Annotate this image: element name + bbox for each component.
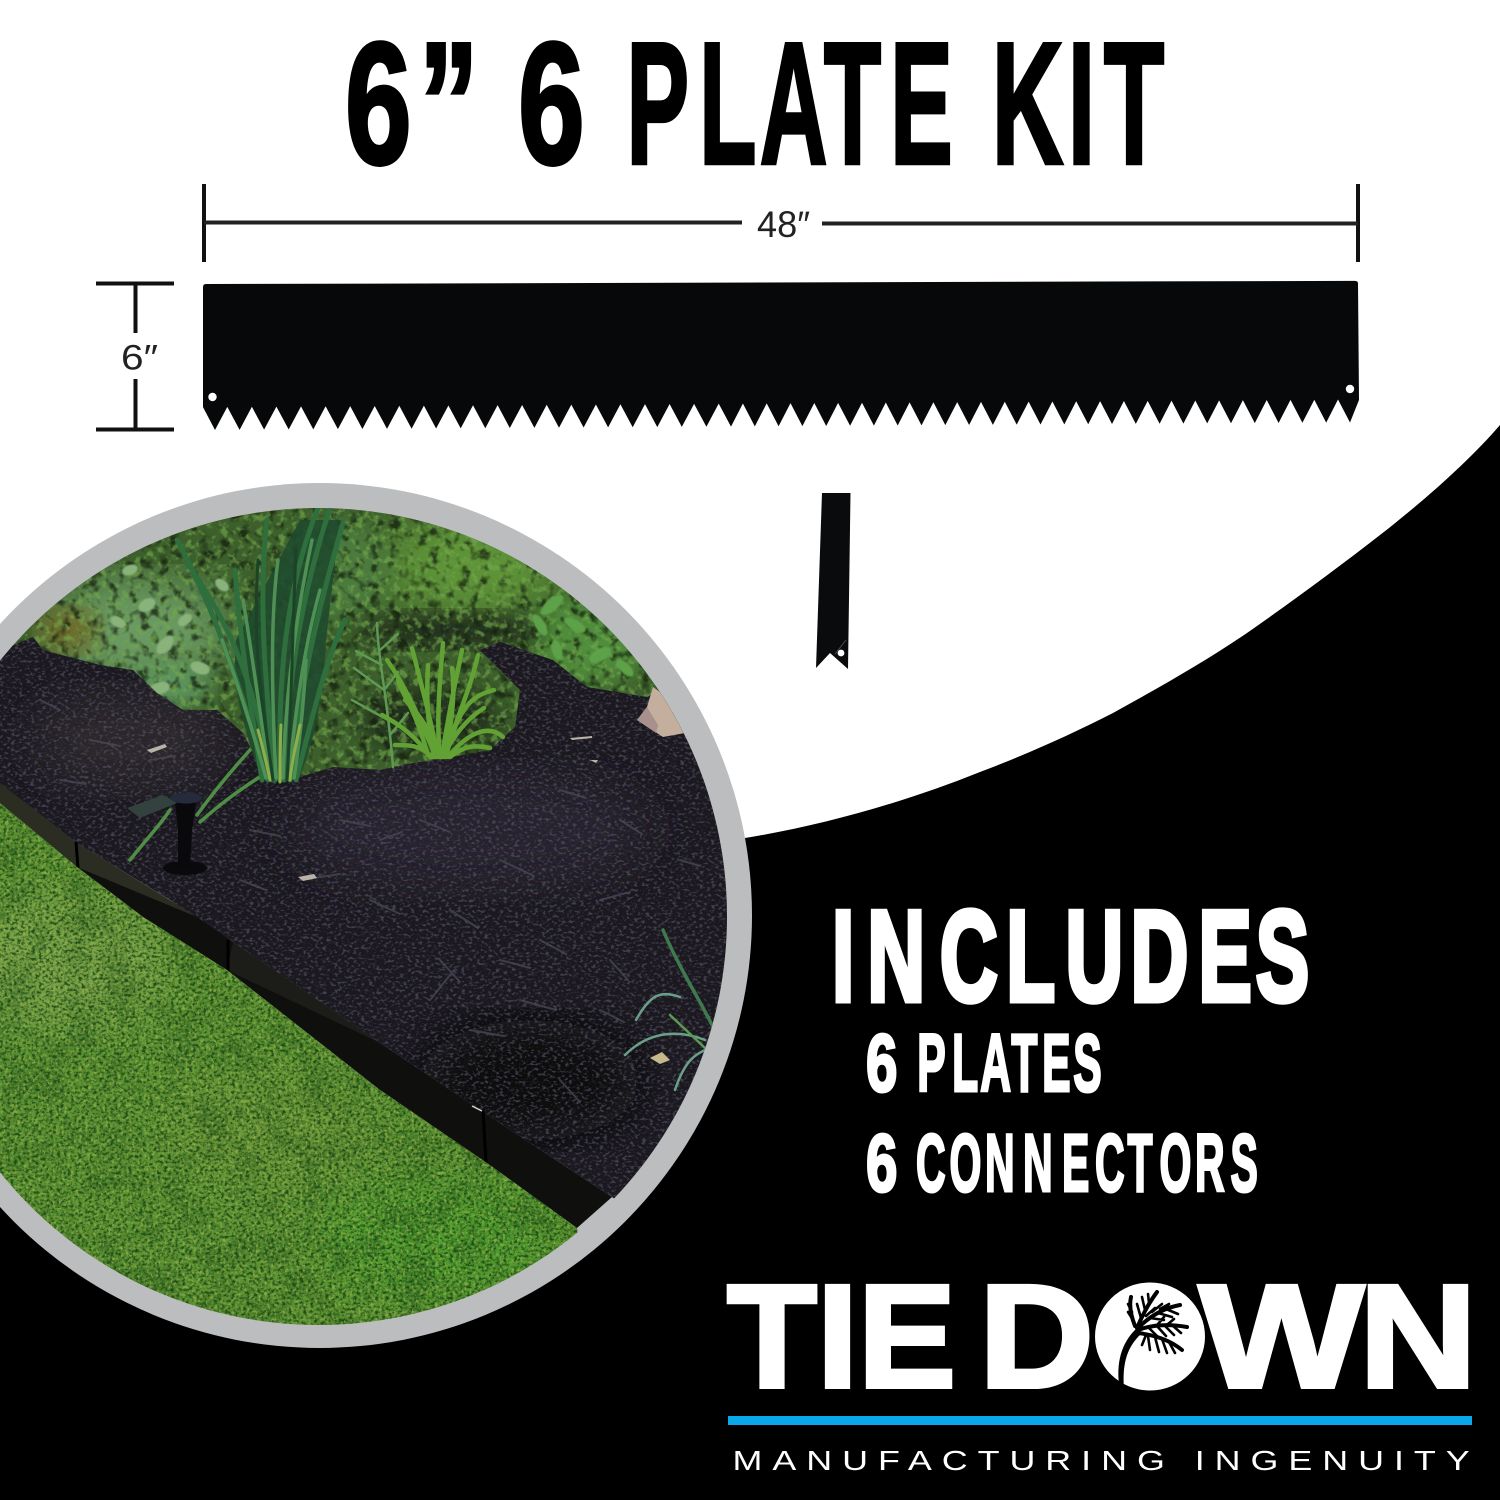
title: KIT xyxy=(992,7,1164,202)
connector stake xyxy=(816,493,850,669)
includes item: connectors: 6 xyxy=(866,1117,897,1208)
bright grassy plant xyxy=(382,643,503,757)
wordmark xyxy=(727,1255,1477,1419)
lawn xyxy=(0,803,578,1325)
dimension: 48 inch width: 48″ xyxy=(757,204,810,245)
title: 6” xyxy=(345,6,479,201)
tall iris plant xyxy=(177,508,345,782)
plate: serrated steel edging xyxy=(203,276,1359,430)
mulch bed xyxy=(0,637,727,1198)
wordmark: T xyxy=(727,1255,817,1419)
wordmark: E xyxy=(858,1255,956,1419)
grey ring xyxy=(0,483,752,1348)
steel edging in ground xyxy=(0,783,612,1228)
includes item: plates: PLATES xyxy=(917,1017,1102,1109)
dimension: 6 inch height xyxy=(96,282,174,432)
wordmark: D xyxy=(979,1255,1094,1419)
product photo in grey ring xyxy=(0,480,770,1390)
foliage background xyxy=(0,508,710,800)
tagline: MANUFACTURING INGENUITY xyxy=(733,1445,1470,1476)
wordmark: I xyxy=(817,1255,858,1419)
title: PLATE xyxy=(626,5,953,201)
rock xyxy=(637,687,685,737)
includes item: connectors: CONNECTORS xyxy=(916,1116,1258,1209)
title: 6 xyxy=(518,6,585,201)
includes item: plates: 6 xyxy=(866,1017,897,1108)
solar path light xyxy=(127,750,258,875)
small weeds xyxy=(625,930,713,1090)
icon: palm tree in letter O xyxy=(1095,1282,1205,1390)
photo xyxy=(0,508,727,1325)
includes heading: INCLUDES xyxy=(832,884,1309,1028)
black curved panel xyxy=(0,425,1500,1500)
dimension: 48 inch width xyxy=(202,184,1360,262)
title xyxy=(345,5,1164,202)
blue rule xyxy=(728,1416,1472,1425)
dimension: 6 inch height: 6″ xyxy=(121,338,158,378)
slender lily plant xyxy=(352,623,408,767)
wordmark: N xyxy=(1359,1255,1477,1419)
wordmark: W xyxy=(1199,1255,1364,1419)
brand logo xyxy=(727,1255,1477,1476)
